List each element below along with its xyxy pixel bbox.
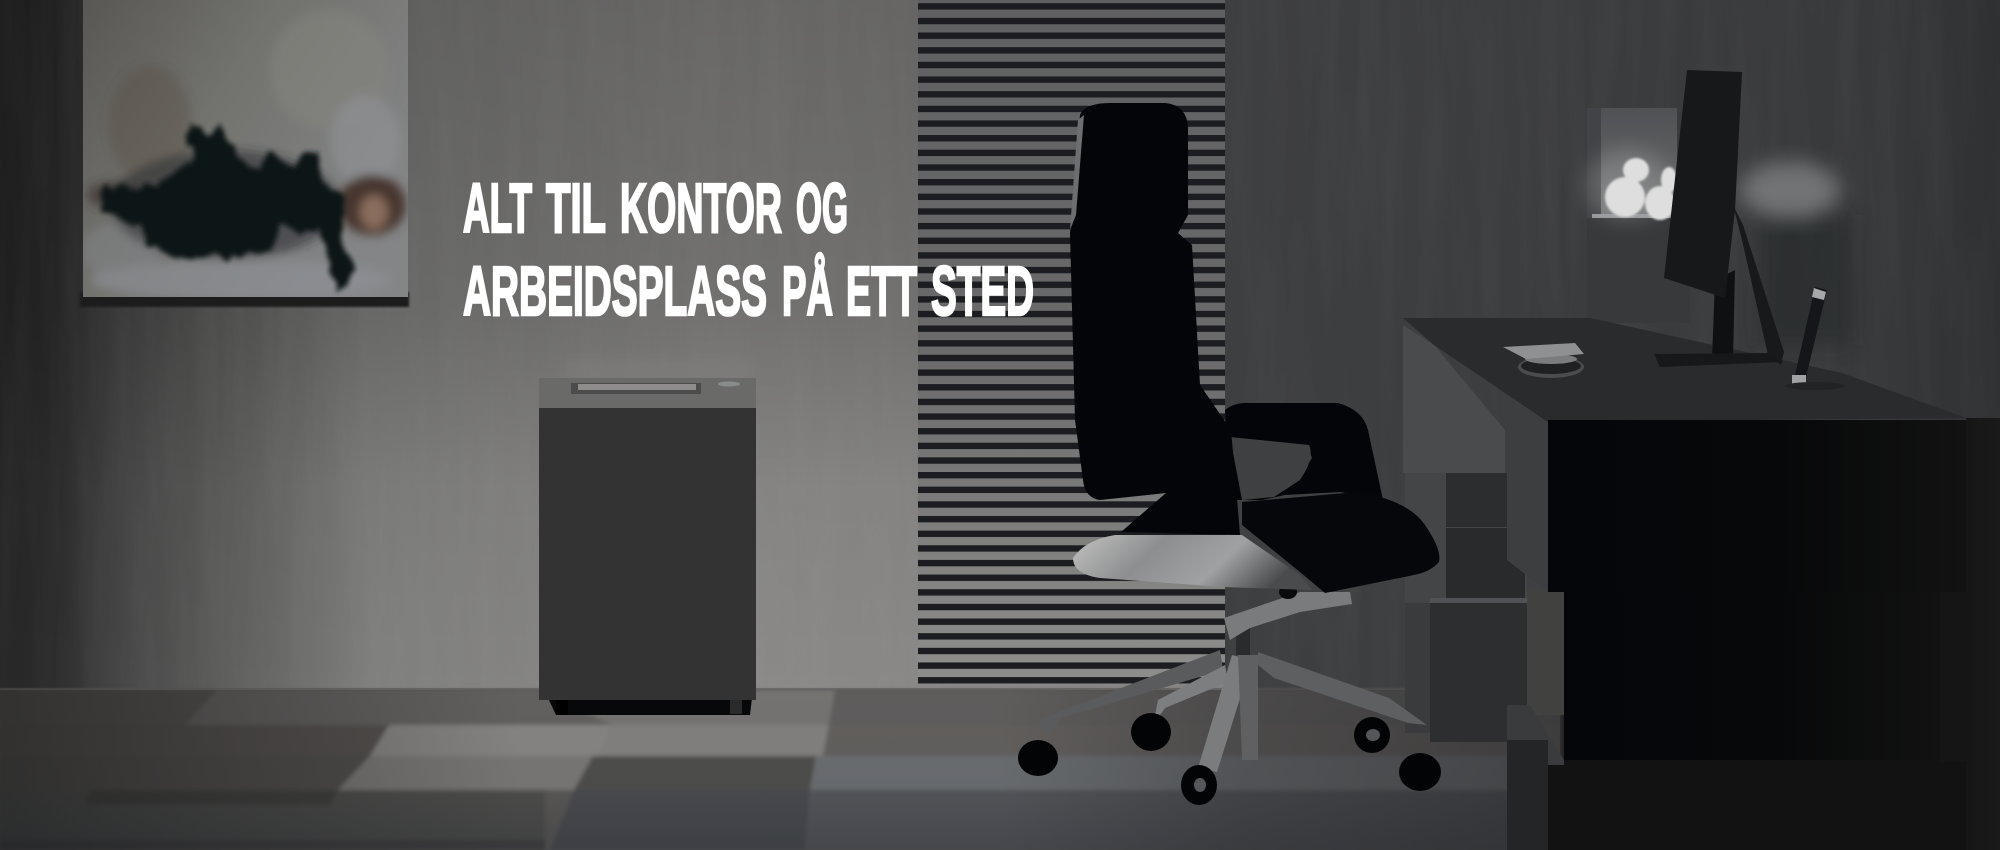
floor [0,688,2000,850]
shredder slot [571,382,740,394]
desk and shelving [1403,70,2000,850]
desk glass top [1403,318,1966,422]
keyboard [1503,343,1584,359]
monitor [1664,70,1742,298]
title line 1: KONTOR [620,169,782,247]
desk base [1507,705,2000,850]
wall light reflection [1740,162,1840,218]
lamp niche [1586,108,1690,323]
shredder cabinet [539,358,756,715]
title line 2: STED [931,252,1034,330]
seat underside [1073,535,1312,590]
painting canvas [83,0,408,297]
desk lower body [1564,592,1942,760]
shredder lid [539,378,756,408]
title line 2: ARBEIDSPLASS [463,252,767,330]
desk side [1507,405,1548,592]
title: OG [796,169,848,247]
chair casters [1018,713,1441,805]
chair base legs [1038,650,1427,772]
chair column [1224,585,1352,655]
title line 2: PÅ [782,252,833,330]
backrest highlight [1070,115,1084,230]
shredder feet [548,698,752,715]
mouse [1518,354,1584,378]
caster hubs [1194,729,1380,792]
title line 2: ETT [846,252,917,330]
monitor stand [1654,205,1784,367]
phone [1785,287,1845,390]
painting shadow [80,292,409,307]
painting [80,0,409,307]
chair seat [1242,492,1439,593]
title line 1: TIL [546,169,606,247]
right edge shadow [1966,418,2000,850]
painting ink strokes [80,10,406,300]
chair backrest [1070,103,1240,535]
drawer stack [1405,473,1564,742]
title [463,169,1034,330]
shredder wall glow [565,358,755,382]
chair armrest [1225,403,1383,500]
wall stripe panel [918,0,1225,684]
shredder body [539,407,756,700]
shelf side panel [1403,325,1505,473]
title line 1 [463,169,848,247]
title line 1: ALT [463,169,532,247]
desk front [1548,420,1966,592]
office chair [1018,103,1441,805]
